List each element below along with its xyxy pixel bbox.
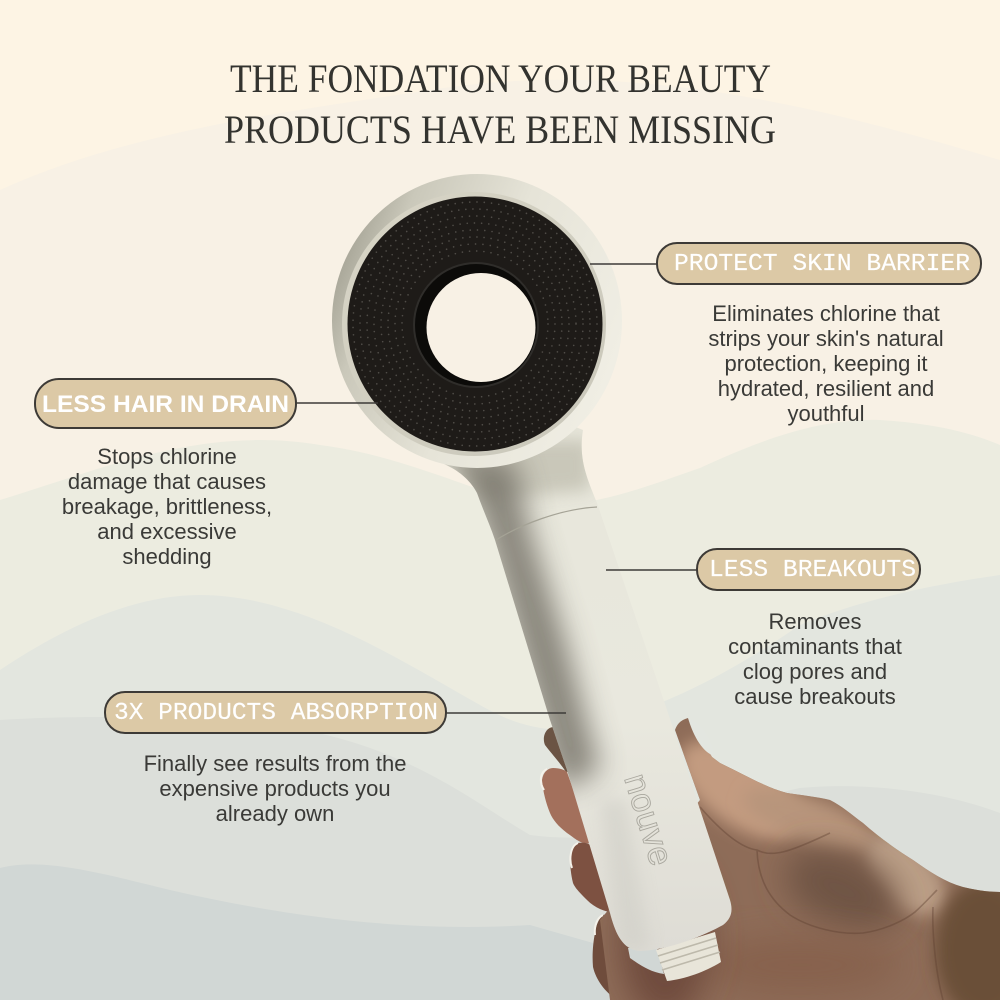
finger: rear (544, 727, 585, 772)
hand holding the shower head (541, 700, 1000, 1000)
badge (105, 692, 446, 733)
description: breakage, brittleness, (62, 494, 272, 519)
callout: less breakouts (697, 549, 920, 709)
title: THE FONDATION YOUR BEAUTY (230, 56, 771, 101)
description: Eliminates chlorine that (712, 301, 940, 326)
description: contaminants that (728, 634, 902, 659)
callout: less hair in drain (35, 379, 296, 569)
description: and excessive (97, 519, 237, 544)
description: clog pores and (743, 659, 887, 684)
leader lines (296, 264, 697, 713)
badge (697, 549, 920, 590)
thumbnail (688, 718, 714, 756)
badge: LESS BREAKOUTS (709, 557, 916, 584)
dark nozzle plate (348, 196, 602, 452)
fingernails (541, 769, 603, 935)
handle shading (446, 434, 641, 948)
shower head product (332, 174, 732, 981)
callout: 3x products absorption (105, 692, 446, 826)
badge: 3X PRODUCTS ABSORPTION (114, 700, 438, 727)
palm and thumb (600, 700, 1000, 1000)
badge: LESS HAIR IN DRAIN (42, 391, 289, 418)
head outer ring (332, 174, 622, 468)
description: youthful (787, 401, 865, 426)
finger: ring and lower palm (593, 915, 720, 1000)
centre hole (426, 273, 536, 382)
inner silver rim (342, 192, 606, 456)
logo: nouve (616, 769, 680, 870)
description: Finally see results from the (144, 751, 406, 776)
handle seam (496, 507, 597, 540)
title: PRODUCTS HAVE BEEN MISSING (224, 107, 776, 152)
palm creases (700, 807, 943, 1000)
description: already own (216, 801, 334, 826)
description: shedding (122, 544, 212, 569)
handle (400, 380, 732, 951)
badge (35, 379, 296, 428)
description: strips your skin's natural (708, 326, 944, 351)
gap between fingers and connector (628, 948, 664, 974)
callout: protect skin barrier (657, 243, 981, 426)
nozzle dots (353, 202, 597, 446)
description: Stops chlorine (97, 444, 237, 469)
description: Removes (769, 609, 861, 634)
inner black ring (414, 263, 538, 387)
description: hydrated, resilient and (718, 376, 934, 401)
badge: PROTECT SKIN BARRIER (674, 251, 970, 278)
description: damage that causes (68, 469, 266, 494)
description: expensive products you (159, 776, 391, 801)
description: cause breakouts (734, 684, 896, 709)
threaded connector (656, 932, 721, 981)
badge (657, 243, 981, 284)
title (224, 56, 776, 152)
description: protection, keeping it (724, 351, 928, 376)
finger: index (542, 768, 592, 843)
finger: middle (570, 843, 615, 913)
